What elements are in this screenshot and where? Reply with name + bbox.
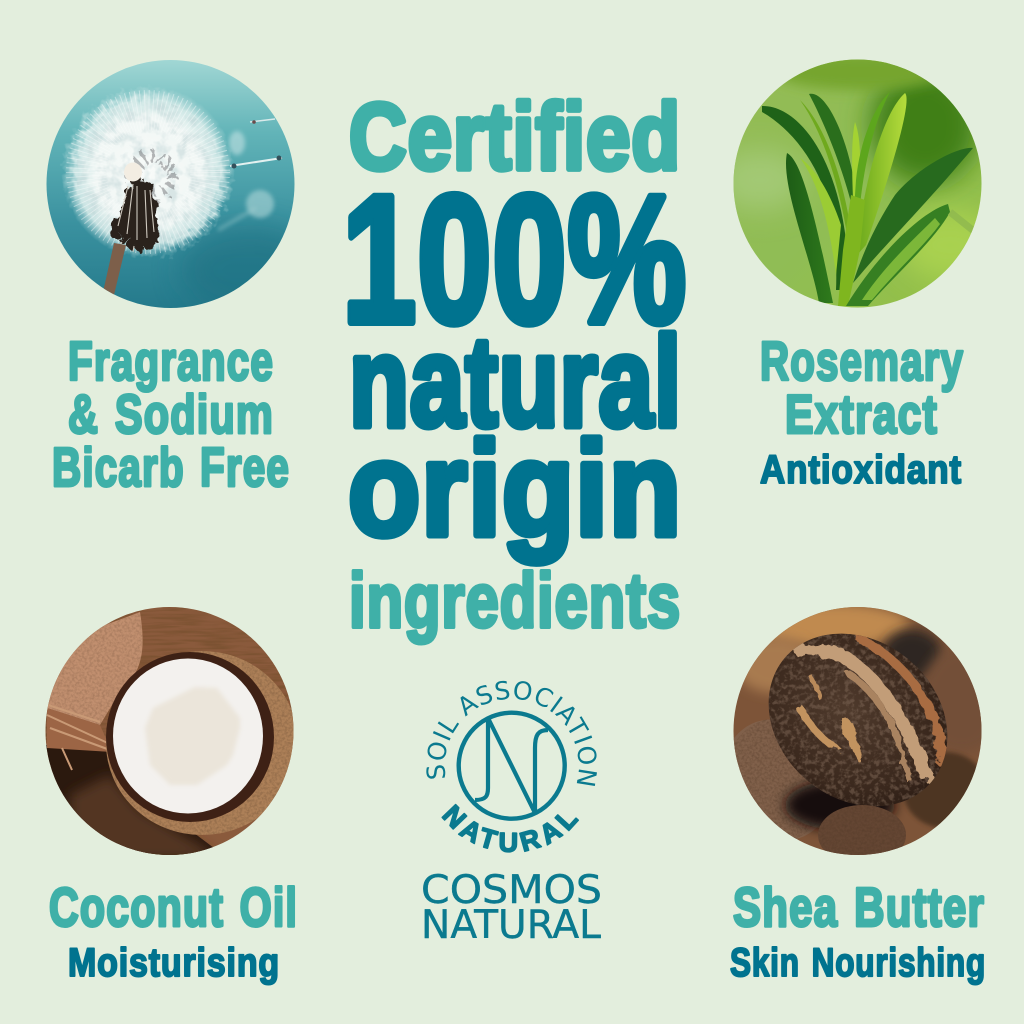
text: COSMOS NATURAL: COSMOS	[421, 868, 602, 913]
heading: Rosemary Extract	[760, 330, 964, 445]
text: COSMOS NATURAL: NATURAL	[421, 903, 601, 948]
heading: Rosemary Extract: Extract	[785, 383, 938, 445]
photo: shea butter	[734, 607, 982, 855]
heading: Fragrance and Sodium Bicarb Free: Bicarb Free	[52, 436, 290, 498]
photo: rosemary	[734, 60, 982, 308]
logo arc text: NATURAL: NATURAL	[441, 804, 580, 853]
logo ring	[459, 713, 565, 819]
heading: Fragrance and Sodium Bicarb Free: Fragrance	[68, 330, 274, 392]
heading: Fragrance and Sodium Bicarb Free	[52, 330, 290, 498]
logo: Soil Association Natural	[426, 680, 597, 853]
subheading: Antioxidant: Antioxidant	[760, 448, 962, 492]
heading: Coconut Oil: Coconut Oil	[49, 876, 298, 938]
title line: ingredients: ingredients	[349, 558, 681, 644]
title line: Certified: Certified	[349, 84, 681, 190]
text: COSMOS NATURAL	[421, 868, 602, 948]
logo N mark	[475, 718, 548, 813]
title line: 100%: 100%	[342, 157, 687, 361]
title line: natural: natural	[349, 311, 682, 454]
main title	[342, 84, 687, 644]
photo: coconut	[40, 600, 300, 860]
heading: Fragrance and Sodium Bicarb Free: & Sodium	[68, 383, 274, 445]
photo: dandelion	[46, 60, 294, 308]
logo arc text: SOIL ASSOCIATION	[426, 680, 597, 786]
subheading: Moisturising: Moisturising	[68, 941, 280, 985]
title line: origin: origin	[348, 415, 682, 564]
